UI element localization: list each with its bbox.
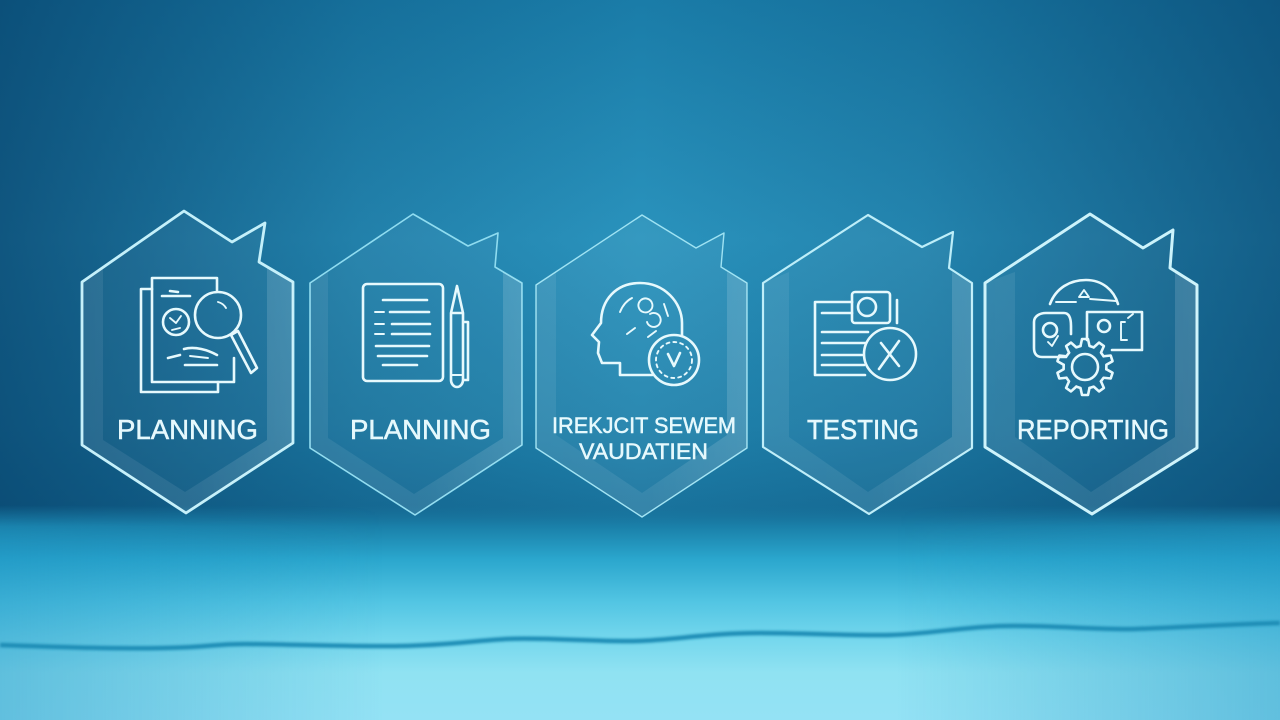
icon: head with clock check xyxy=(592,283,699,385)
label: TESTING xyxy=(807,414,919,445)
panel: testing xyxy=(763,215,972,514)
icon: document and magnifier xyxy=(141,278,257,392)
hexagon body xyxy=(82,211,293,513)
label line 1: IREKJCIT SEWEM xyxy=(552,413,736,438)
hexagon body xyxy=(763,215,972,514)
panel: planning 2 xyxy=(310,214,522,515)
hexagon body xyxy=(310,214,522,515)
hexagon glass band xyxy=(536,272,747,517)
hexagon body xyxy=(985,214,1197,514)
background wall xyxy=(0,0,1280,530)
background floor xyxy=(0,505,1280,720)
hexagon glass band xyxy=(310,272,522,515)
hexagon body xyxy=(536,215,747,517)
icon: list with camera and cross xyxy=(815,292,916,380)
panel: validation xyxy=(536,215,747,517)
label: PLANNING xyxy=(117,414,258,445)
hexagon glass band xyxy=(985,272,1197,514)
floor wave line xyxy=(0,623,1280,648)
icon: checklist and pencil xyxy=(363,284,468,387)
hexagon glass band xyxy=(82,268,293,513)
panel: planning 1 xyxy=(82,211,293,513)
panel: reporting xyxy=(985,214,1197,514)
hexagon glass band xyxy=(763,272,972,514)
label: REPORTING xyxy=(1017,414,1169,445)
icon part: gear xyxy=(1056,339,1114,395)
label: PLANNING xyxy=(350,414,491,445)
label line 2: VAUDATIEN xyxy=(579,439,708,464)
icon: cycle, screens and gear xyxy=(1034,280,1142,395)
